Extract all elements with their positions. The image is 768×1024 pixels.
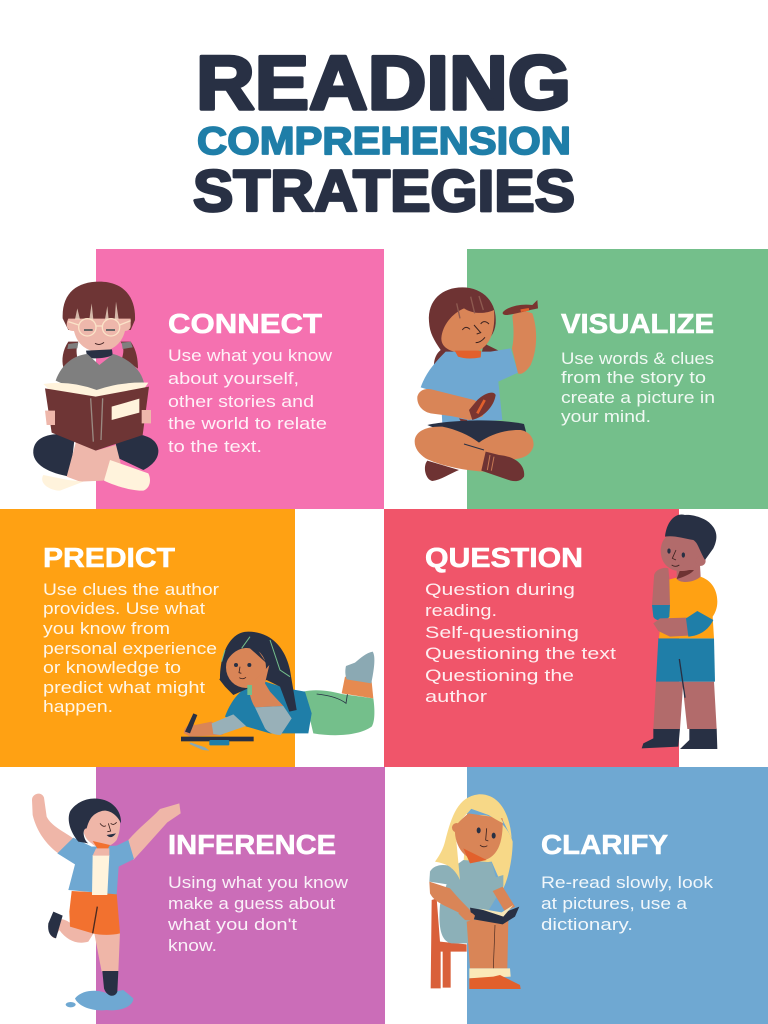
text: connect: about yourself, <box>168 369 299 388</box>
text: predict: you know from <box>43 619 170 638</box>
panel: visualize <box>467 249 768 509</box>
text: predict: personal experience <box>43 639 217 658</box>
text: inference: what you don't <box>167 915 297 934</box>
text: connect: other stories and <box>168 392 314 411</box>
title <box>193 41 575 224</box>
icon: girl reading a book <box>33 282 158 491</box>
text: question: reading. <box>425 601 497 620</box>
icon: girl holding toy planes <box>415 287 538 481</box>
text: question <box>425 580 616 706</box>
heading: predict: PREDICT <box>43 542 175 573</box>
text: predict: Use clues the author <box>43 580 219 599</box>
panel: clarify <box>467 767 768 1024</box>
heading: visualize: VISUALIZE <box>561 308 714 339</box>
text: question: Question during <box>425 580 575 599</box>
text: clarify <box>541 873 714 934</box>
text: clarify: at pictures, use a <box>541 894 688 913</box>
text: question: author <box>425 687 487 706</box>
heading: clarify: CLARIFY <box>541 829 668 860</box>
heading: connect: CONNECT <box>168 308 322 339</box>
text: predict: provides. Use what <box>43 599 205 618</box>
text: visualize: Use words & clues <box>561 349 714 368</box>
icon: boy jumping in a puddle <box>32 794 181 1010</box>
text: connect: the world to relate <box>168 414 327 433</box>
text: inference: make a guess about <box>168 894 335 913</box>
text: visualize: create a picture in <box>561 388 715 407</box>
text: inference: Using what you know <box>168 873 349 892</box>
text: question: Self-questioning <box>425 623 579 642</box>
text: visualize <box>561 349 715 426</box>
panel: connect <box>96 249 384 509</box>
icon: girl lying down drawing <box>181 632 374 751</box>
title: STRATEGIES <box>193 159 575 224</box>
panel: inference <box>96 767 385 1024</box>
panel: question <box>384 509 679 767</box>
title: READING <box>196 41 571 126</box>
text: predict <box>43 580 219 716</box>
panel: predict <box>0 509 295 767</box>
text: visualize: your mind. <box>561 407 651 426</box>
heading: inference: INFERENCE <box>168 829 336 860</box>
heading: question: QUESTION <box>425 542 583 573</box>
text: clarify: dictionary. <box>541 915 633 934</box>
icon: girl seated with a book <box>429 794 521 989</box>
text: connect <box>168 346 333 456</box>
text: connect: Use what you know <box>168 346 333 365</box>
icon: boy thinking <box>642 515 717 749</box>
text: clarify: Re-read slowly, look <box>541 873 714 892</box>
text: connect: to the text. <box>168 437 262 456</box>
text: visualize: from the story to <box>561 368 706 387</box>
text: question: Questioning the text <box>425 644 616 663</box>
text: question: Questioning the <box>425 666 574 685</box>
text: predict: or knowledge to <box>43 658 181 677</box>
title: COMPREHENSION <box>197 120 571 163</box>
text: inference <box>167 873 349 955</box>
text: inference: know. <box>168 936 217 955</box>
text: predict: happen. <box>43 697 113 716</box>
text: predict: predict what might <box>43 678 205 697</box>
